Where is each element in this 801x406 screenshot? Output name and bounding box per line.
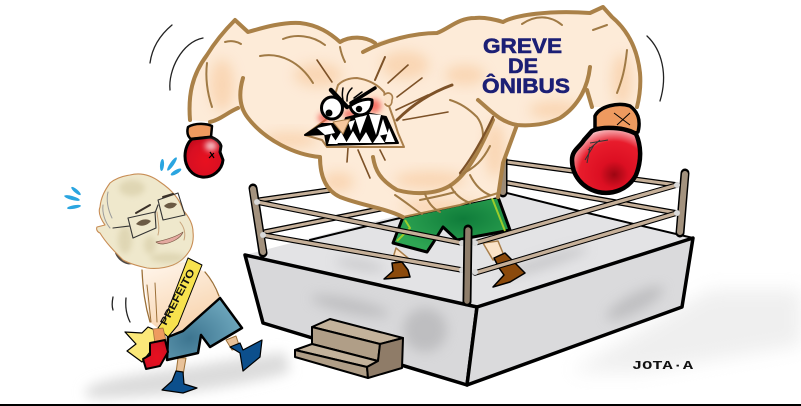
artist signature: JOTA·A bbox=[632, 359, 694, 373]
body outline bbox=[190, 7, 640, 217]
strike text on arm: DE bbox=[508, 55, 538, 78]
motion lines bbox=[112, 25, 664, 322]
right boxing glove bbox=[572, 104, 640, 193]
mayor blue shorts bbox=[167, 298, 242, 360]
mayor glasses bbox=[113, 193, 185, 238]
boxer green shorts bbox=[393, 197, 510, 252]
floor shadows bbox=[84, 290, 801, 398]
angry face bbox=[305, 78, 404, 147]
left boxing glove bbox=[185, 124, 223, 177]
mayor glove bbox=[143, 328, 168, 369]
bottom border line bbox=[0, 404, 801, 406]
mayor character bbox=[97, 174, 262, 393]
mayor sash with label bbox=[158, 258, 202, 337]
boxer: strike figure bbox=[190, 7, 640, 287]
front ropes bbox=[254, 182, 680, 302]
boxing ring platform bbox=[245, 193, 693, 385]
muscle definition lines bbox=[206, 17, 627, 214]
sweat drops bbox=[64, 156, 182, 210]
back ropes and posts bbox=[253, 160, 685, 253]
dark wrinkle strokes bbox=[317, 57, 493, 178]
strike text on arm: ÔNIBUS bbox=[482, 74, 570, 98]
nose bbox=[333, 119, 350, 134]
yellow bow bbox=[125, 327, 158, 362]
strike text on arm bbox=[482, 35, 570, 98]
eyes and brows bbox=[322, 88, 375, 119]
mayor bare torso bbox=[142, 262, 220, 334]
muscular torso and arms bbox=[190, 7, 640, 217]
mayor eyes, brows and mouth bbox=[136, 194, 185, 244]
strike text on arm: GREVE bbox=[483, 35, 562, 58]
mayor head bbox=[97, 174, 193, 268]
ring steps bbox=[295, 319, 403, 378]
mayor sash with label: PREFEITO bbox=[158, 267, 198, 327]
mayor legs and boots bbox=[162, 336, 262, 393]
boxer legs and boots bbox=[384, 241, 525, 287]
mouth and teeth bbox=[305, 113, 398, 145]
